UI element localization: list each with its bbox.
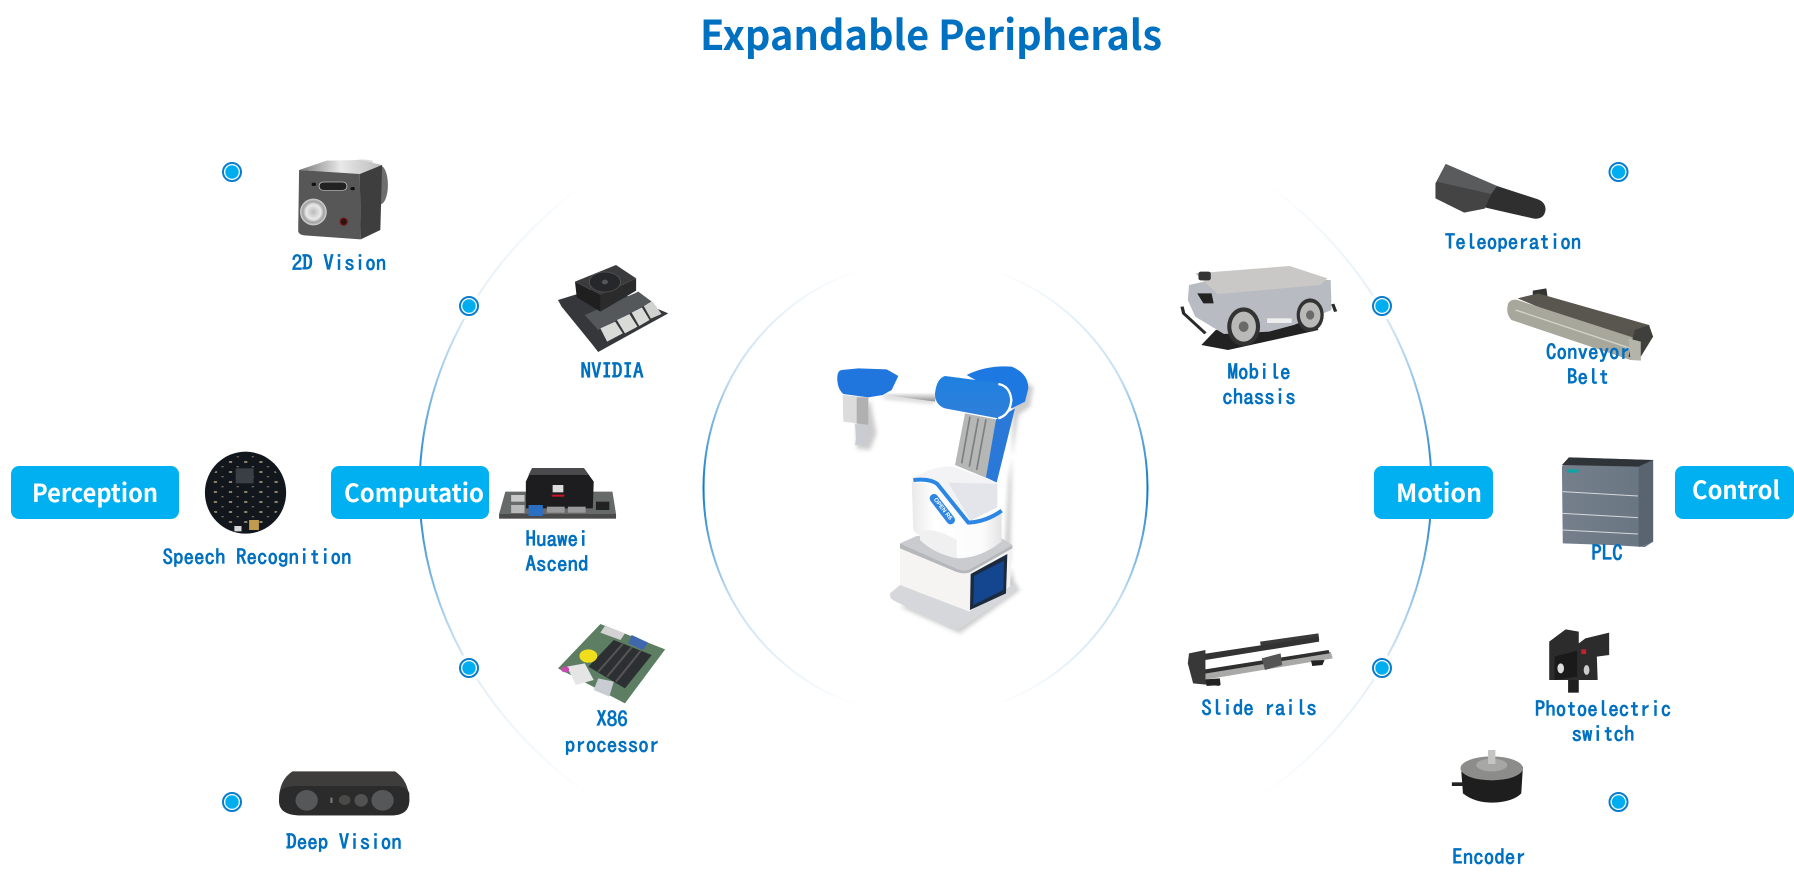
label: Huawei Ascend: Huawei (526, 528, 588, 550)
icon: robot arm: OPEN R6 (932, 497, 953, 522)
icon: 2D vision camera (298, 159, 388, 239)
label: X86 processor (565, 708, 659, 756)
pill: Motion (1374, 466, 1493, 519)
label: Mobile chassis (1222, 362, 1296, 408)
label: Photoelectric switch: Photoelectric (1535, 698, 1671, 720)
pill: Perception: Perception (32, 474, 158, 510)
label: Photoelectric switch: switch (1572, 724, 1634, 744)
icon: NVIDIA board (558, 265, 668, 352)
icon: Huawei Ascend board (499, 468, 616, 519)
node dot: deep vision (219, 789, 245, 815)
pill: Control: Control (1692, 471, 1780, 507)
label: Teleoperation: Teleoperation (1445, 232, 1581, 252)
icon: teleoperation handle (1435, 164, 1546, 219)
inner ring (704, 260, 1148, 716)
node dot: slide rails (1368, 654, 1396, 682)
icon: conveyor belt (1507, 288, 1653, 361)
pill: Control (1675, 466, 1794, 519)
label: Conveyor Belt (1546, 342, 1630, 388)
node dot: 2D vision (219, 159, 245, 185)
node dot: NVIDIA (455, 292, 483, 320)
pill: Computation (331, 466, 489, 519)
icon: deep vision camera (279, 771, 409, 815)
label: Encoder: Encoder (1452, 846, 1526, 868)
label: Slide rails: Slide rails (1201, 698, 1317, 718)
label: Huawei Ascend (524, 528, 588, 574)
label: Huawei Ascend: Ascend (524, 554, 588, 574)
icon: X86 motherboard (558, 624, 665, 703)
icon: robot arm (837, 366, 1033, 633)
pill: Computation: Computatio (344, 474, 484, 510)
icon: slide rails (1188, 633, 1333, 686)
pill: Motion: Motion (1396, 474, 1482, 510)
label: PLC: PLC (1591, 542, 1623, 564)
label: Conveyor Belt: Belt (1567, 366, 1609, 388)
label: Photoelectric switch (1535, 698, 1671, 744)
icon: PLC (1562, 457, 1653, 547)
label: 2D Vision: 2D Vision (292, 252, 386, 274)
title: Expandable Peripherals (700, 2, 1162, 62)
icon: speech recognition board (205, 452, 286, 534)
node dot: X86 (455, 654, 483, 682)
icon: encoder (1452, 750, 1523, 803)
label: NVIDIA: NVIDIA (580, 360, 644, 382)
icon: photoelectric switch (1549, 629, 1609, 693)
node dot: mobile chassis (1368, 292, 1396, 320)
label: Mobile chassis: chassis (1222, 386, 1296, 408)
label: X86 processor: processor (565, 734, 659, 756)
label: Speech Recognition: Speech Recognition (162, 546, 352, 568)
label: Mobile chassis: Mobile (1228, 362, 1290, 382)
pill: Computation: n (405, 517, 421, 553)
pill: Perception (11, 466, 179, 519)
label: Conveyor Belt: Conveyor (1546, 342, 1630, 362)
node dot: teleoperation (1606, 159, 1632, 185)
icon: mobile chassis (1182, 266, 1336, 350)
label: X86 processor: X86 (596, 708, 628, 730)
outer ring (420, 76, 1432, 877)
label: Deep Vision: Deep Vision (286, 832, 402, 852)
node dot: encoder (1606, 789, 1632, 815)
